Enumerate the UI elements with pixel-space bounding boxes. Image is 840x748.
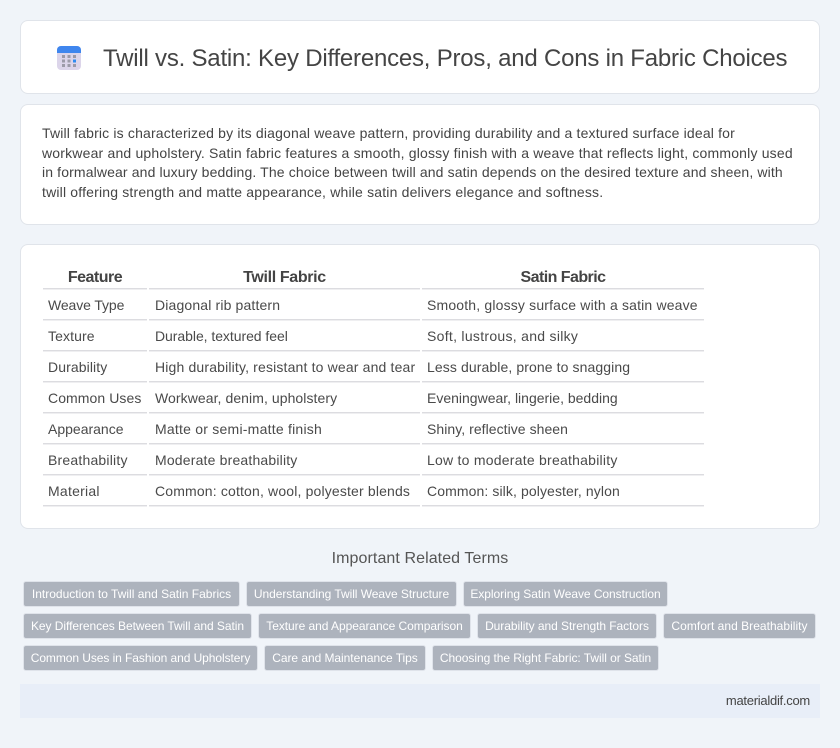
table row: material: Common: silk, polyester, nylon (427, 483, 620, 499)
text block: introduction: workwear and upholstery. Satin fabric features a smooth, glossy finish with a weave that reflects light, commonly used (42, 145, 793, 161)
title: Twill vs. Satin: Key Differences, Pros, and Cons in Fabric Choices (103, 45, 787, 72)
tag: Understanding Twill Weave Structure (254, 587, 449, 601)
table row: common uses: Eveningwear, lingerie, bedding (427, 390, 618, 406)
tag (432, 645, 659, 671)
table row: weave type: Smooth, glossy surface with a satin weave (427, 297, 698, 313)
table row: appearance: Matte or semi-matte finish (155, 421, 322, 437)
table row: breathability: Low to moderate breathability (427, 452, 618, 468)
tag: Key Differences Between Twill and Satin (31, 619, 244, 633)
table row: material (43, 483, 704, 507)
table row: common uses: Workwear, denim, upholstery (155, 390, 337, 406)
tag: Exploring Satin Weave Construction (470, 587, 661, 601)
table row: weave type (43, 297, 704, 321)
text block: introduction: in formalwear and luxury bedding. The choice between twill and satin depends on the desired texture and sheen, with (42, 164, 783, 180)
text block: introduction: twill offering strength and matte appearance, while satin delivers elegance and softness. (42, 184, 603, 200)
icon: calendar (57, 46, 81, 70)
table row: durability (43, 359, 704, 383)
table row: durability: High durability, resistant to wear and tear (155, 359, 415, 375)
table row: durability: Less durable, prone to snagging (427, 359, 630, 375)
table row: weave type: Weave Type (48, 297, 124, 313)
table row: weave type: Diagonal rib pattern (155, 297, 280, 313)
panel: introduction (20, 104, 820, 225)
tag: Introduction to Twill and Satin Fabrics (32, 587, 231, 601)
panel: title header (20, 20, 820, 94)
table row: breathability: Breathability (48, 452, 128, 468)
table row: texture: Texture (48, 328, 95, 344)
table row: breathability: Moderate breathability (155, 452, 297, 468)
table row: breathability (43, 452, 704, 476)
tag (663, 613, 816, 639)
tag (23, 613, 252, 639)
heading: important related terms: Important Related Terms (332, 550, 508, 567)
table row: texture: Durable, textured feel (155, 328, 288, 344)
table header: Twill Fabric (243, 269, 326, 286)
table row: common uses (43, 390, 704, 414)
tag: Comfort and Breathability (671, 619, 808, 633)
table row: appearance: Appearance (48, 421, 124, 437)
tag list (23, 581, 816, 671)
tag (477, 613, 657, 639)
tag: Care and Maintenance Tips (272, 651, 418, 665)
table header: Feature (68, 269, 122, 286)
table row: appearance: Shiny, reflective sheen (427, 421, 568, 437)
tag (23, 645, 258, 671)
tag: Common Uses in Fashion and Upholstery (31, 651, 250, 665)
text block: introduction (42, 125, 793, 200)
tag: Durability and Strength Factors (485, 619, 649, 633)
text block: introduction: Twill fabric is characterized by its diagonal weave pattern, providing durability and a textured surface ideal for (42, 125, 735, 141)
table row: durability: Durability (48, 359, 107, 375)
table row: material: Material (48, 483, 100, 499)
table row: material: Common: cotton, wool, polyester blends (155, 483, 410, 499)
footer source text: materialdif.com (726, 693, 810, 708)
table row: texture: Soft, lustrous, and silky (427, 328, 578, 344)
tag (264, 645, 426, 671)
tag: Texture and Appearance Comparison (266, 619, 463, 633)
tag (258, 613, 471, 639)
panel: comparison table (20, 244, 820, 529)
table row: appearance (43, 421, 704, 445)
tag: Choosing the Right Fabric: Twill or Satin (440, 651, 651, 665)
table header: Satin Fabric (520, 269, 605, 286)
table row: common uses: Common Uses (48, 390, 141, 406)
tag (23, 581, 240, 607)
tag (246, 581, 457, 607)
table header (43, 269, 704, 290)
footer bar (20, 684, 820, 718)
table row: texture (43, 328, 704, 352)
tag (463, 581, 668, 607)
